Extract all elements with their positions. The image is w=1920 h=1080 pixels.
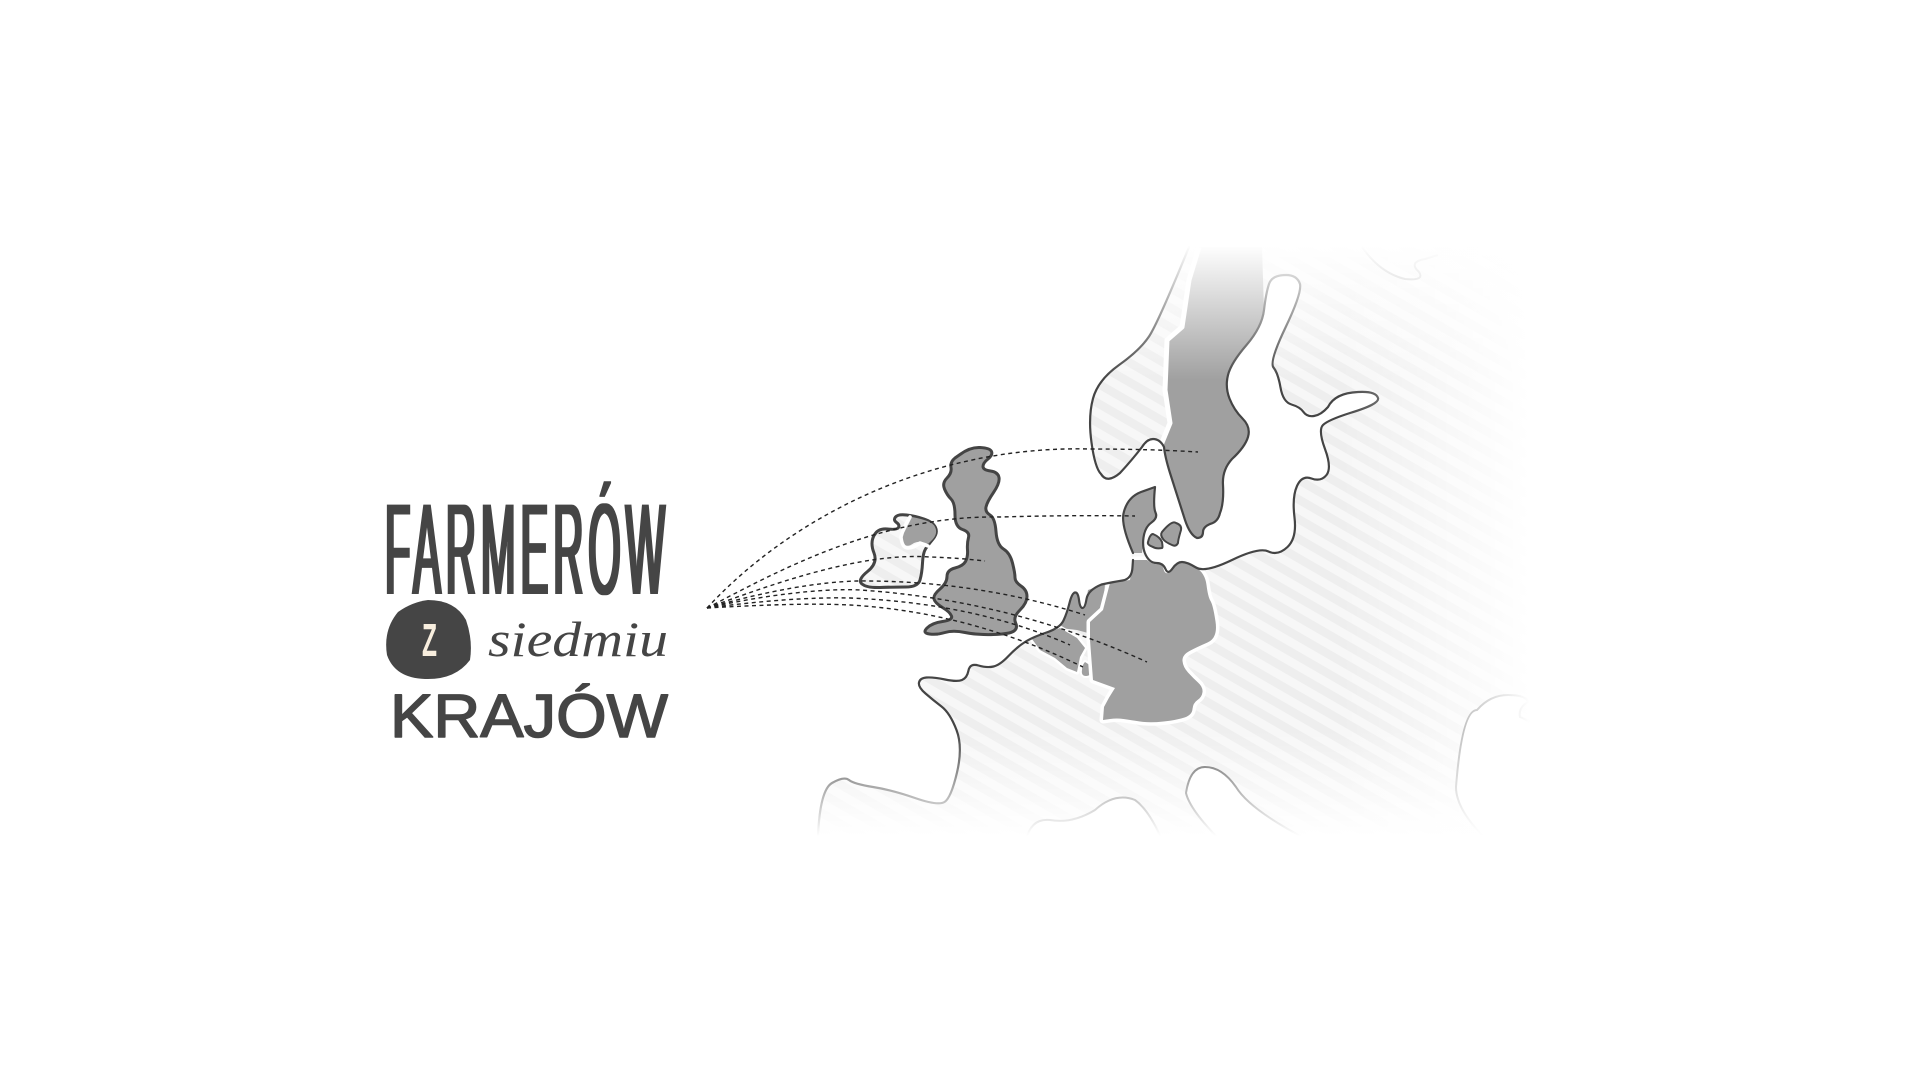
- country: Northern Ireland: [902, 517, 936, 546]
- land with striped pattern: [818, 247, 1540, 836]
- coastline: [818, 247, 1378, 836]
- Adriatic sea: [1186, 767, 1308, 840]
- badge blob: [386, 600, 471, 679]
- country: Luxembourg: [1082, 662, 1092, 676]
- country: United Kingdom: [925, 447, 1027, 635]
- country: Belgium: [1032, 628, 1085, 672]
- country: Denmark: [1123, 487, 1156, 553]
- country: Germany: [1090, 560, 1216, 722]
- country: Sweden: [1163, 247, 1264, 538]
- title line: KRAJÓW: KRAJÓW: [390, 682, 668, 750]
- Arctic coast: [1362, 247, 1438, 279]
- border: Norway and Sweden: [1161, 247, 1199, 445]
- border: Ireland and Northern Ireland: [901, 517, 928, 548]
- title line: siedmiu: siedmiu: [488, 611, 668, 667]
- route to Sweden: [707, 449, 1198, 608]
- title line: FARMERÓW: FARMERÓW: [385, 478, 665, 622]
- fade overlays: [780, 240, 1590, 856]
- badge letter z: Z: [422, 614, 437, 666]
- country: Netherlands: [1060, 584, 1105, 633]
- dashed routes from the title: [707, 449, 1198, 667]
- country: Ireland: [860, 515, 936, 588]
- route to Germany: [707, 590, 1147, 662]
- title: [385, 478, 668, 750]
- route to Belgium: [707, 598, 1070, 645]
- route to Denmark: [707, 516, 1135, 608]
- route to Luxembourg: [707, 604, 1083, 667]
- Danish islands: [1148, 522, 1181, 548]
- route to United Kingdom: [707, 556, 985, 608]
- route to Netherlands: [707, 581, 1085, 615]
- Black Sea: [1456, 695, 1560, 840]
- map of Europe: [707, 240, 1590, 856]
- Mediterranean coast: [1026, 798, 1162, 840]
